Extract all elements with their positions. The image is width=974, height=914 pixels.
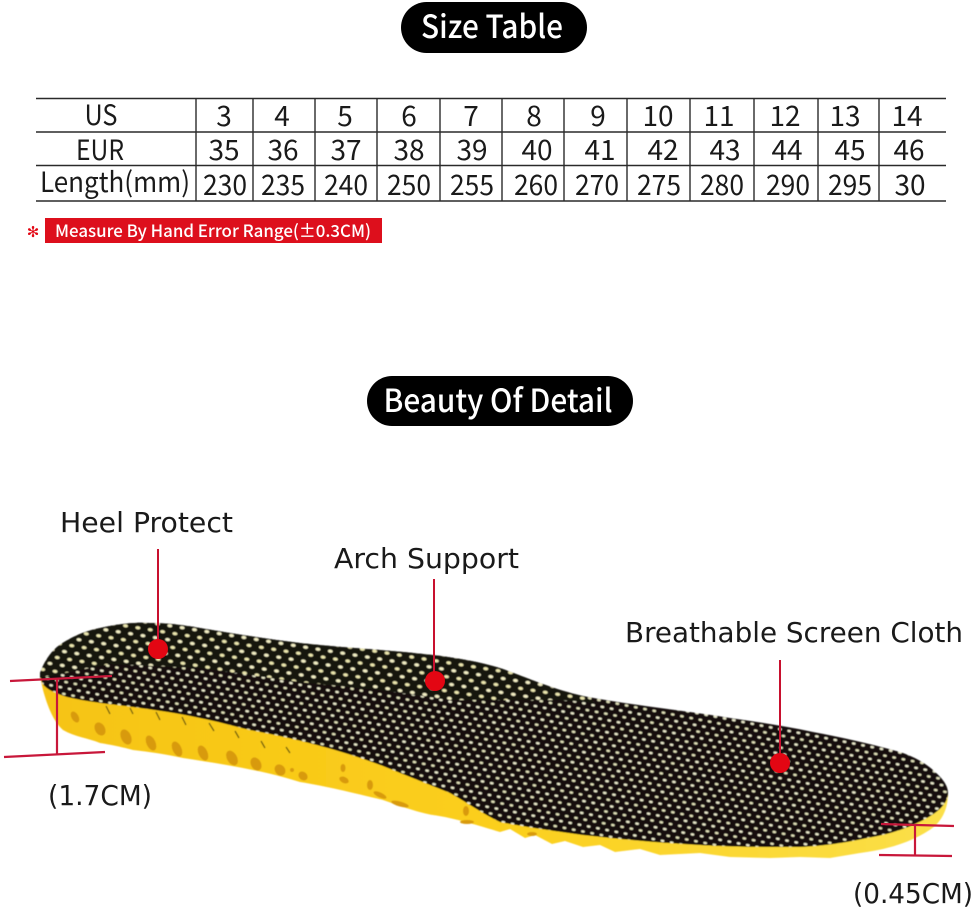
size table: 295	[828, 164, 872, 204]
size table: 270	[575, 164, 619, 204]
size table: 290	[766, 164, 810, 204]
note: measurement error: Measure By Hand Error Range(±0.3CM)	[55, 217, 371, 242]
size table: 35	[208, 129, 240, 169]
callout: Arch Support: Arch Support	[334, 542, 519, 575]
size table: 38	[393, 129, 425, 169]
size table: 7	[463, 95, 479, 135]
dimension: heel thickness 1.7CM	[4, 676, 152, 812]
mesh top surface	[40, 623, 948, 847]
size table: 43	[709, 129, 741, 169]
size table: 14	[891, 95, 923, 135]
size table: 3	[216, 95, 232, 135]
size table: 12	[769, 95, 801, 135]
size table: 235	[261, 164, 305, 204]
dimension: heel thickness 1.7CM: (1.7CM)	[48, 779, 152, 812]
size table: 10	[642, 95, 674, 135]
callout: Breathable Screen Cloth	[625, 616, 963, 773]
size table	[36, 94, 946, 204]
size table: 8	[526, 95, 542, 135]
size table: 46	[893, 129, 925, 169]
size table: 230	[203, 164, 247, 204]
size table: 42	[647, 129, 679, 169]
size table: 40	[521, 129, 553, 169]
size table: 45	[834, 129, 866, 169]
size table: Length(mm)	[40, 161, 190, 201]
size table: 255	[450, 164, 494, 204]
size table: 44	[771, 129, 803, 169]
size table: 37	[330, 129, 362, 169]
callout: Heel Protect	[60, 506, 233, 659]
size table: 39	[456, 129, 488, 169]
brighter mesh highlight	[39, 622, 596, 704]
heading: Size Table: Size Table	[421, 2, 563, 48]
size table: 30	[894, 164, 926, 204]
callout: Heel Protect: Heel Protect	[60, 506, 233, 539]
heading: Beauty Of Detail: Beauty Of Detail	[384, 376, 612, 422]
size table: 260	[514, 164, 558, 204]
dimension: toe thickness 0.45CM	[853, 824, 973, 910]
size table: 36	[267, 129, 299, 169]
callout: Arch Support	[334, 542, 519, 691]
size table: 240	[324, 164, 368, 204]
note: measurement error: ✻	[27, 223, 39, 241]
size table: EUR	[76, 129, 124, 169]
size table: 280	[700, 164, 744, 204]
foam sole dark ticks	[106, 706, 290, 753]
size table: 13	[829, 95, 861, 135]
insole illustration	[40, 623, 948, 858]
size table: 275	[637, 164, 681, 204]
size table: 6	[401, 95, 417, 135]
size table: 11	[703, 95, 735, 135]
size table: 250	[387, 164, 431, 204]
size table: 4	[274, 95, 290, 135]
size table: US	[84, 94, 118, 134]
size table: 5	[337, 95, 353, 135]
foam sole shading wedges	[69, 710, 537, 836]
callout: Breathable Screen Cloth: Breathable Screen Cloth	[625, 616, 963, 649]
foam sole	[40, 660, 948, 858]
size table: 41	[584, 129, 616, 169]
size table: 9	[590, 95, 606, 135]
